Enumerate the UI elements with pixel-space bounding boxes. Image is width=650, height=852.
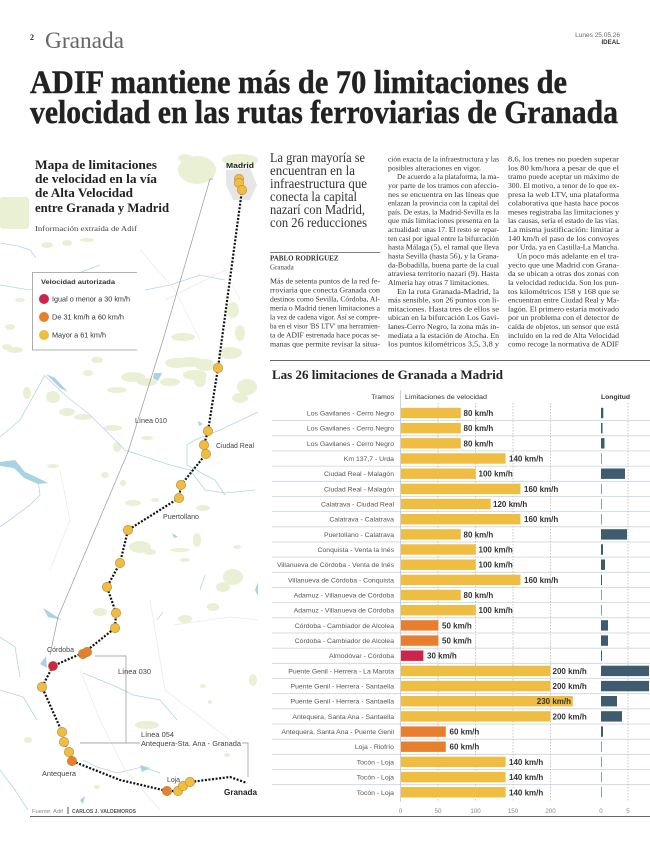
row 21: 200 km/h bbox=[552, 712, 587, 721]
article column 2: nes se encuentra en las líneas que bbox=[388, 190, 500, 199]
article column 3: colaborativa que hasta hace pocos bbox=[508, 199, 619, 208]
high speed route bbox=[42, 179, 247, 791]
row 12: 160 km/h bbox=[524, 576, 558, 585]
article column 1: rroviaria que conecta Granada con bbox=[270, 286, 380, 294]
article column 2 bbox=[388, 154, 500, 349]
page header: Granada bbox=[45, 28, 124, 53]
source credit bbox=[32, 807, 136, 815]
Madrid urban area bbox=[226, 168, 257, 200]
article column 3: da se ubican a otras dos zonas con bbox=[508, 269, 619, 278]
row 15 bbox=[295, 620, 608, 631]
article column 2: actualidad: unas 17. El resto se repar- bbox=[388, 225, 499, 234]
map place labels: Loja bbox=[167, 775, 181, 784]
row 6: 160 km/h bbox=[524, 485, 558, 494]
article column 3: como recoge la normativa de ADIF bbox=[508, 340, 619, 349]
article column 1: Más de setenta puntos de la red fe- bbox=[270, 276, 380, 286]
row 1 bbox=[307, 408, 603, 418]
article column 3: por un problema con el detector de bbox=[508, 313, 620, 322]
row 1: Los Gavilanes - Cerro Negro bbox=[307, 410, 394, 418]
article column 2: ten casi por igual entre la bifurcación bbox=[388, 234, 499, 243]
article deck: nazarí con Madrid, bbox=[270, 203, 365, 218]
row 2 bbox=[307, 423, 602, 433]
row 7 bbox=[321, 499, 602, 509]
article column 2: país. De estas, la Madrid-Sevilla es la bbox=[388, 207, 500, 216]
article column 3: yecto que une Madrid con Grana- bbox=[508, 260, 620, 269]
article column 3: 8,6, los trenes no pueden superar bbox=[508, 154, 620, 164]
row 24: 140 km/h bbox=[509, 758, 543, 767]
row 5 bbox=[324, 468, 625, 479]
article column 3: la velocidad reducida. Son los pun- bbox=[508, 278, 619, 287]
article column 2: los puntos kilométricos 3,5, 3,8 y bbox=[388, 340, 499, 349]
row 6 bbox=[324, 484, 602, 494]
chart axis labels: 5 bbox=[626, 808, 630, 815]
title: ADIF mantiene más de 70 limitaciones de bbox=[30, 65, 567, 101]
byline: Granada bbox=[270, 264, 295, 272]
article column 3: tos kilométricos 158 y 168 que se bbox=[508, 287, 620, 296]
article deck: encuentran en la bbox=[270, 164, 356, 179]
row 3: Los Gavilanes - Cerro Negro bbox=[307, 441, 394, 448]
chart axis labels: 150 bbox=[508, 808, 519, 815]
chart axis labels: 100 bbox=[470, 808, 481, 815]
map place labels: Granada bbox=[224, 788, 258, 797]
chart title: Las 26 limitaciones de Granada a Madrid bbox=[272, 368, 503, 382]
row 5: Ciudad Real - Malagón bbox=[324, 471, 394, 478]
row 22 bbox=[281, 726, 603, 737]
chart axis labels: 0 bbox=[599, 808, 603, 815]
row 21: Antequera, Santa Ana - Santaella bbox=[292, 714, 394, 721]
row 10 bbox=[318, 544, 603, 555]
map place labels: Antequera-Sta. Ana - Granada bbox=[141, 739, 242, 748]
row 15: 50 km/h bbox=[442, 621, 472, 630]
source credit: CARLOS J. VALDEMOROS bbox=[72, 809, 136, 815]
page header: 2 bbox=[30, 33, 34, 42]
article column 3: meses registraba las limitaciones y bbox=[508, 207, 619, 216]
row 11 bbox=[277, 560, 605, 570]
map heading bbox=[35, 158, 169, 233]
chart grid bbox=[272, 390, 650, 802]
row 8: Calatrava - Calatrava bbox=[329, 517, 394, 524]
row 23: Loja - Riofrío bbox=[355, 744, 394, 751]
row 15: Córdoba - Cambiador de Alcolea bbox=[295, 623, 394, 630]
article column 3: por Urda, ya en Castilla-La Mancha. bbox=[508, 243, 619, 252]
article column 3: presa la web LTV, una plataforma bbox=[508, 190, 620, 199]
article column 3 bbox=[508, 154, 620, 349]
article column 2: Almería hay otras 7 limitaciones. bbox=[388, 278, 489, 287]
article deck: La gran mayoría se bbox=[270, 151, 365, 166]
row 25: 140 km/h bbox=[509, 773, 543, 782]
row 19: 200 km/h bbox=[552, 682, 587, 691]
chart axis labels: 200 bbox=[545, 808, 556, 815]
article column 2: posibles alteraciones en vigor. bbox=[388, 163, 481, 172]
row 18: 200 km/h bbox=[552, 667, 587, 676]
title bbox=[30, 65, 618, 131]
row 22: Antequera, Santa Ana - Puente Genil bbox=[281, 729, 394, 736]
map place labels: Madrid bbox=[226, 161, 255, 170]
map heading: Mapa de limitaciones bbox=[35, 158, 157, 172]
map place labels: Puertollano bbox=[163, 512, 199, 521]
chart column headers bbox=[371, 394, 630, 401]
row 25 bbox=[357, 772, 602, 782]
article column 1: ta de ADIF estrenada hace pocas se- bbox=[270, 330, 380, 340]
chart column headers: Longitud bbox=[601, 394, 630, 401]
article column 3: La misma justificación: limitar a bbox=[508, 225, 620, 234]
row 4 bbox=[344, 453, 602, 464]
article column 3: lagón. El primero estaría motivado bbox=[508, 304, 619, 313]
chart axis labels bbox=[399, 808, 630, 815]
article deck: con 26 reducciones bbox=[270, 216, 367, 231]
speed limit markers bbox=[37, 174, 247, 796]
map place labels: Línea 030 bbox=[118, 667, 151, 676]
row 26: Tocón - Loja bbox=[357, 790, 394, 797]
row 7: Calatrava - Ciudad Real bbox=[321, 502, 394, 508]
row 17: Almodóvar - Córdoba bbox=[329, 653, 394, 660]
row 26 bbox=[357, 787, 602, 798]
legend: Mayor a 61 km/h bbox=[52, 332, 106, 340]
chart column headers: Tramos bbox=[371, 394, 395, 401]
row 9: 80 km/h bbox=[464, 530, 493, 539]
row 20 bbox=[291, 696, 617, 706]
map place labels: Antequera bbox=[42, 769, 77, 778]
article column 3: 300. El motivo, a tenor de lo que ex- bbox=[508, 181, 619, 190]
article column 3: tramo puede aceptar un máximo de bbox=[508, 172, 620, 181]
byline: PABLO RODRÍGUEZ bbox=[270, 254, 339, 262]
row 18: Puente Genil - Herrera - La Marota bbox=[288, 668, 394, 675]
article column 2: ción exacta de la infraestructura y las bbox=[388, 154, 499, 164]
row 2: 80 km/h bbox=[464, 424, 493, 433]
article deck bbox=[270, 151, 367, 231]
article column 1: ba en el visor 'BS LTV' una herramien- bbox=[270, 322, 380, 330]
row 14 bbox=[294, 605, 602, 615]
map heading: entre Granada y Madrid bbox=[35, 201, 169, 215]
map heading: de Alta Velocidad bbox=[35, 186, 133, 200]
article column 1: mería o Madrid tienen limitaciones a bbox=[270, 304, 381, 312]
legend: De 31 km/h a 60 km/h bbox=[52, 314, 124, 322]
map place labels: Córdoba bbox=[47, 645, 75, 654]
row 9: Puertollano - Calatrava bbox=[324, 532, 394, 539]
row 22: 60 km/h bbox=[450, 728, 479, 737]
row 23 bbox=[355, 742, 602, 752]
article column 3: caída de objetos, un sensor que está bbox=[508, 322, 620, 331]
row 4: Km 137,7 - Urda bbox=[344, 456, 394, 463]
row 4: 140 km/h bbox=[509, 454, 543, 464]
row 20: Puente Genil - Herrera - Santaella bbox=[291, 699, 394, 706]
map bbox=[0, 154, 258, 810]
row 16: Córdoba - Cambiador de Alcolea bbox=[295, 638, 394, 645]
chart column headers: Limitaciones de velocidad bbox=[405, 394, 487, 401]
map heading: Información extraída de Adif bbox=[35, 224, 138, 233]
article column 2: da-Bobadilla, buena parte de la cual bbox=[388, 260, 499, 269]
row 25: Tocón - Loja bbox=[357, 775, 394, 782]
row 11: Villanueva de Córdoba - Venta de Inés bbox=[277, 562, 395, 569]
article deck: infraestructura que bbox=[270, 177, 367, 192]
row 14: 100 km/h bbox=[478, 606, 513, 615]
article column 3: Un poco más adelante en el tra- bbox=[517, 252, 619, 260]
legend bbox=[32, 272, 137, 350]
article column 2: ubican en la bifurcación Los Gavi- bbox=[388, 313, 499, 322]
row 21 bbox=[292, 711, 622, 722]
row 13: 80 km/h bbox=[464, 591, 493, 600]
page header bbox=[30, 28, 620, 53]
row 23: 60 km/h bbox=[450, 743, 479, 752]
map terrain patches bbox=[0, 154, 258, 789]
row 7: 120 km/h bbox=[493, 500, 527, 509]
row 16 bbox=[295, 635, 608, 646]
map place labels bbox=[42, 161, 258, 797]
chart axis labels: 0 bbox=[399, 808, 403, 815]
legend: Velocidad autorizada bbox=[41, 279, 115, 286]
article column 1: la vez de cadena vigor. Así se compre- bbox=[270, 312, 380, 322]
byline bbox=[270, 252, 380, 272]
railway line 030 connector bbox=[95, 656, 126, 743]
article column 2: En la ruta Granada-Madrid, la bbox=[397, 287, 500, 296]
article column 2: yor parte de los tramos con afeccio- bbox=[388, 181, 499, 190]
map place labels: Ciudad Real bbox=[216, 441, 254, 450]
map heading: de velocidad en la vía bbox=[35, 172, 157, 186]
row 6: Ciudad Real - Malagón bbox=[324, 486, 394, 493]
article column 1: destinos como Sevilla, Córdoba, Al- bbox=[270, 294, 380, 304]
row 16: 50 km/h bbox=[442, 637, 472, 646]
article column 1 bbox=[270, 276, 381, 348]
article column 2: mediata a la estación de Atocha. En bbox=[388, 331, 499, 340]
row 1: 80 km/h bbox=[464, 409, 493, 418]
row 20: 230 km/h bbox=[537, 697, 571, 706]
row 3: 80 km/h bbox=[464, 439, 493, 448]
row 3 bbox=[307, 438, 604, 448]
row 8 bbox=[329, 514, 602, 524]
row 24 bbox=[357, 757, 602, 767]
railway line 054 connector bbox=[80, 743, 248, 777]
article column 2: mitaciones. Hasta tres de ellos se bbox=[388, 304, 500, 313]
row 13 bbox=[294, 590, 602, 600]
article column 2: hasta Málaga (5), el ramal que lleva bbox=[388, 243, 500, 252]
railway line 010 bbox=[50, 179, 213, 655]
row 17 bbox=[329, 650, 602, 661]
row 10: 100 km/h bbox=[478, 546, 513, 554]
article column 1: manas que permite revisar la situa- bbox=[270, 340, 380, 348]
map place labels: Línea 010 bbox=[135, 416, 167, 425]
article column 2: lanes-Cerro Negro, la zona más in- bbox=[388, 322, 499, 331]
row 17: 30 km/h bbox=[427, 652, 457, 661]
article column 3: los 80 km/hora a pesar de que el bbox=[508, 163, 619, 172]
map place labels: Línea 054 bbox=[141, 730, 174, 739]
article column 2: más sensible, son 26 puntos con li- bbox=[388, 296, 499, 305]
article column 3: 140 km/h el paso de los convoyes bbox=[508, 234, 619, 243]
legend: Igual o menor a 30 km/h bbox=[52, 296, 130, 304]
source credit: Fuente: Adif bbox=[32, 809, 63, 815]
row 24: Tocón - Loja bbox=[357, 759, 394, 766]
rivers and reservoirs bbox=[0, 243, 258, 810]
article column 2: enlazan la provincia con la capital del bbox=[388, 199, 499, 208]
page header: Lunes 25.05.26 bbox=[575, 32, 620, 39]
row 18 bbox=[288, 666, 649, 676]
page header: IDEAL bbox=[601, 39, 620, 46]
row 9 bbox=[324, 529, 627, 540]
row 13: Adamuz - Villanueva de Córdoba bbox=[294, 592, 394, 600]
row 11: 100 km/h bbox=[478, 561, 513, 570]
row 12: Villanueva de Córdoba - Conquista bbox=[288, 577, 394, 584]
article column 2: que más limitaciones presenta en la bbox=[388, 216, 500, 225]
row 5: 100 km/h bbox=[478, 470, 513, 479]
article column 3: las causas, sería el estado de las vías. bbox=[508, 216, 619, 225]
row 10: Conquista - Venta la Inés bbox=[318, 547, 395, 554]
row 12 bbox=[288, 575, 602, 585]
article column 2: hasta Sevilla (hasta 56), y la Grana- bbox=[388, 252, 499, 260]
article column 2: atraviesa territorio nazarí (9). Hasta bbox=[388, 269, 500, 278]
article column 2: De acuerdo a la plataforma, la ma- bbox=[397, 172, 499, 181]
article column 3: encuentran entre Ciudad Real y Ma- bbox=[508, 296, 619, 305]
row 14: Adamuz - Villanueva de Córdoba bbox=[294, 608, 394, 615]
row 8: 160 km/h bbox=[524, 515, 558, 524]
row 2: Los Gavilanes - Cerro Negro bbox=[307, 426, 394, 433]
chart axis labels: 50 bbox=[435, 808, 442, 815]
row 26: 140 km/h bbox=[509, 788, 543, 797]
chart rows bbox=[277, 408, 649, 798]
article column 3: incluido en la red de Alta Velocidad bbox=[508, 331, 619, 340]
row 19 bbox=[291, 681, 649, 691]
row 19: Puente Genil - Herrera - Santaella bbox=[291, 684, 394, 691]
article deck: conecta la capital bbox=[270, 190, 357, 205]
